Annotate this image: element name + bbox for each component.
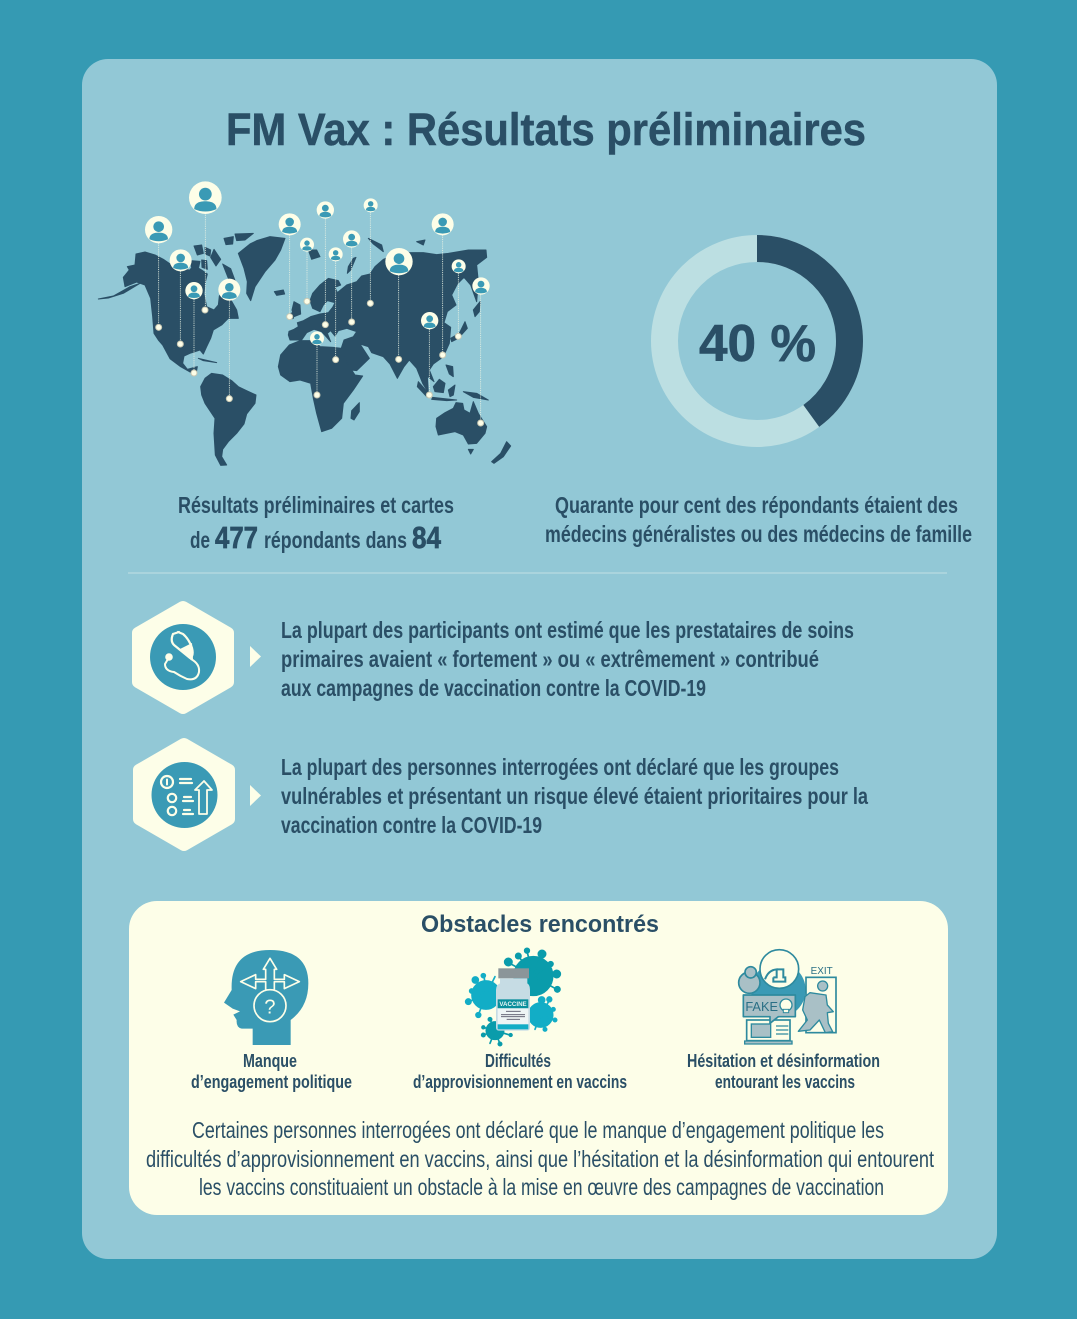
icon: fake news and exit: EXIT	[811, 966, 833, 977]
title: FM Vax : Résultats préliminaires	[226, 104, 866, 155]
icon: head with crossroads	[224, 950, 308, 1045]
icon: vaccine vial with viruses: VACCINE	[499, 1002, 527, 1008]
icon: head with crossroads: ?	[264, 996, 276, 1018]
panel: obstacles	[129, 901, 948, 1215]
icon: fake news and exit: FAKE	[745, 1000, 778, 1014]
text: vulnerable groups	[281, 754, 868, 838]
text: primary care: aux campagnes de vaccination contre la COVID-19	[281, 675, 706, 701]
donut chart: 40 %	[664, 248, 850, 434]
label: vaccine supply: d’approvisionnement en vaccins	[413, 1072, 627, 1092]
text: primary care: primaires avaient « fortement » ou « extrêmement » contribué	[281, 646, 819, 672]
label: political commitment: d’engagement politique	[191, 1072, 352, 1092]
label: hesitancy: Hésitation et désinformation	[687, 1051, 880, 1071]
text: primary care	[281, 617, 854, 701]
text: map caption	[178, 492, 454, 555]
text: map caption: Résultats préliminaires et cartes	[178, 492, 454, 518]
icon: fake news and exit	[739, 950, 836, 1044]
panel: main card	[82, 59, 997, 1259]
text: donut caption: Quarante pour cent des répondants étaient des	[555, 492, 958, 518]
text: vulnerable groups: vulnérables et présentant un risque élevé étaient prioritaires pour la	[281, 783, 868, 809]
icon: vaccine vial with viruses	[466, 948, 560, 1046]
pins	[145, 181, 490, 426]
arrow	[250, 785, 261, 806]
text: obstacles summary	[146, 1117, 934, 1200]
text: obstacles summary: Certaines personnes interrogées ont déclaré que le manque d’engagement politique les	[192, 1117, 884, 1143]
world map with respondent pins	[98, 181, 511, 465]
text: vulnerable groups: vaccination contre la COVID-19	[281, 812, 542, 838]
label: hesitancy	[687, 1051, 880, 1092]
arrow	[250, 646, 261, 667]
label: vaccine supply: Difficultés	[485, 1051, 551, 1071]
text: obstacles summary: les vaccins constituaient un obstacle à la mise en œuvre des campagnes de vaccination	[199, 1174, 884, 1200]
icon: priority list hexagon	[139, 744, 229, 845]
text: donut caption	[545, 492, 972, 547]
label: hesitancy: entourant les vaccins	[715, 1072, 855, 1092]
label: vaccine supply	[413, 1051, 627, 1092]
donut chart: 40 %: 40 %	[699, 315, 816, 373]
label: political commitment: Manque	[243, 1051, 297, 1071]
heading: obstacles: Obstacles rencontrés	[421, 911, 659, 938]
text: map caption: répondants dans	[264, 527, 407, 553]
label: political commitment	[191, 1051, 352, 1092]
text: primary care: La plupart des participants ont estimé que les prestataires de soins	[281, 617, 854, 643]
icon: stethoscope hexagon	[138, 607, 228, 708]
text: map caption: 477	[215, 520, 258, 555]
text: map caption: de	[190, 527, 210, 553]
text: map caption: 84	[412, 520, 442, 555]
text: vulnerable groups: La plupart des personnes interrogées ont déclaré que les groupes	[281, 754, 839, 780]
continents	[98, 233, 511, 465]
